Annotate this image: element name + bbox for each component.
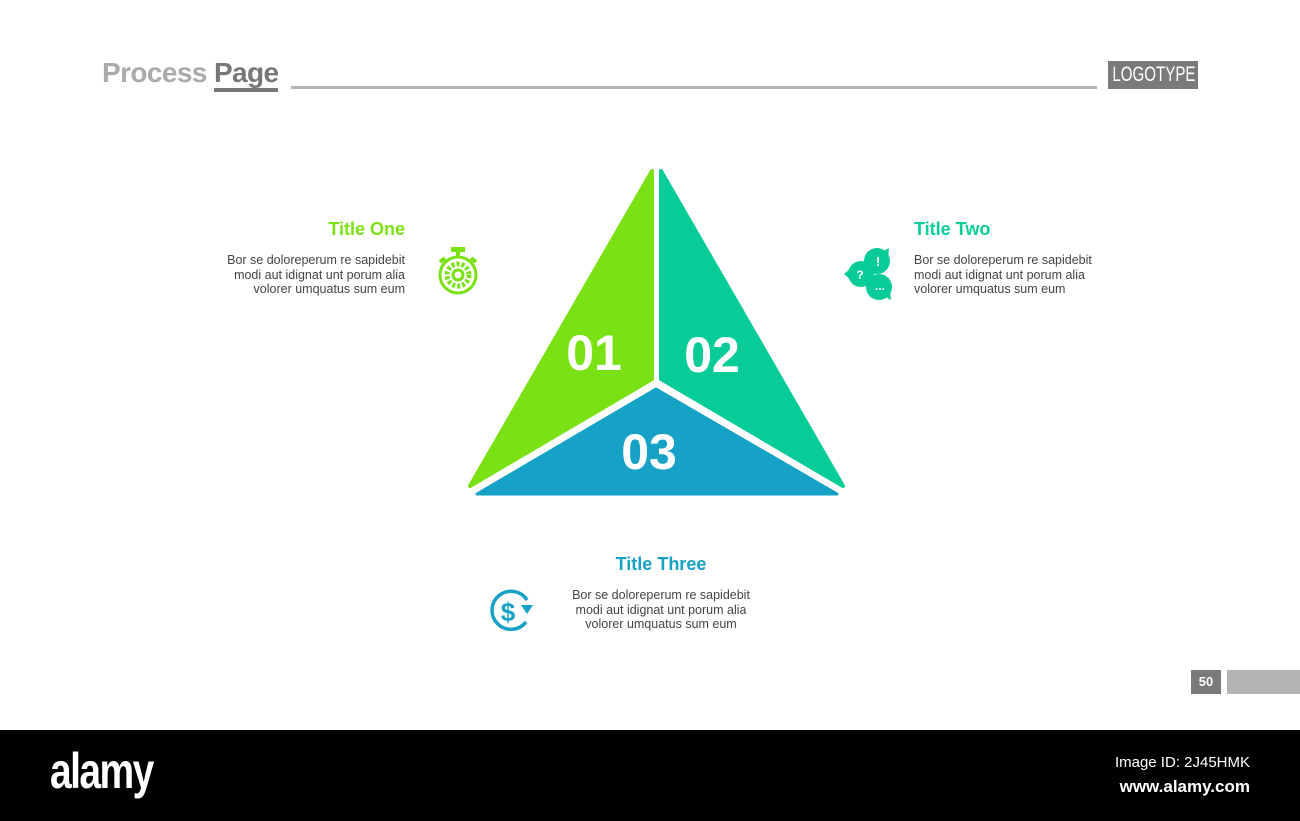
- page number: 50: [1199, 674, 1213, 689]
- icon: speech bubbles: ...: [875, 279, 885, 293]
- text block: Title Three: modi aut idignat unt porum alia: [576, 602, 746, 616]
- icon: dollar cycle: $: [501, 597, 516, 627]
- text block: Title Two: [914, 219, 1092, 296]
- footer url: www.alamy.com: [1120, 777, 1250, 796]
- text block: Title Two: modi aut idignat unt porum alia: [914, 268, 1085, 282]
- text block: Title One: volorer umquatus sum eum: [254, 282, 405, 296]
- icon: speech bubbles: [844, 248, 892, 300]
- footer band: [0, 730, 1300, 821]
- text block: Title Three: Title Three: [616, 554, 706, 574]
- icon: dollar cycle: [492, 591, 533, 629]
- segment 02: [661, 171, 843, 486]
- text block: Title Three: [572, 554, 750, 631]
- page bar: [1227, 670, 1300, 694]
- footer id: Image ID: 2J45HMK: [1115, 754, 1250, 771]
- text block: Title One: Bor se doloreperum re sapidebit: [227, 253, 405, 267]
- icon: stopwatch gear: [440, 247, 476, 293]
- text block: Title One: Title One: [328, 219, 405, 239]
- icon: speech bubbles: ?: [856, 268, 864, 282]
- text block: Title One: modi aut idignat unt porum alia: [234, 268, 405, 282]
- segment 02: 02: [684, 327, 740, 383]
- segment 03: 03: [621, 424, 677, 480]
- segment 03: [477, 389, 837, 494]
- text block: Title Two: volorer umquatus sum eum: [914, 282, 1065, 296]
- page number: [1191, 670, 1221, 694]
- segment 01: 01: [566, 325, 622, 381]
- icon: speech bubbles: !: [876, 254, 880, 269]
- text block: Title Three: Bor se doloreperum re sapidebit: [572, 588, 750, 602]
- text block: Title One: [227, 219, 405, 296]
- logotype: LOGOTYPE: [1112, 63, 1196, 86]
- header title: Process Page: [102, 57, 278, 88]
- text block: Title Three: volorer umquatus sum eum: [585, 617, 737, 631]
- footer logo: alamy: [50, 743, 153, 799]
- text block: Title Two: Bor se doloreperum re sapidebit: [914, 253, 1092, 267]
- header line: [291, 86, 1097, 89]
- segment 01: [470, 171, 652, 486]
- text block: Title Two: Title Two: [914, 219, 990, 239]
